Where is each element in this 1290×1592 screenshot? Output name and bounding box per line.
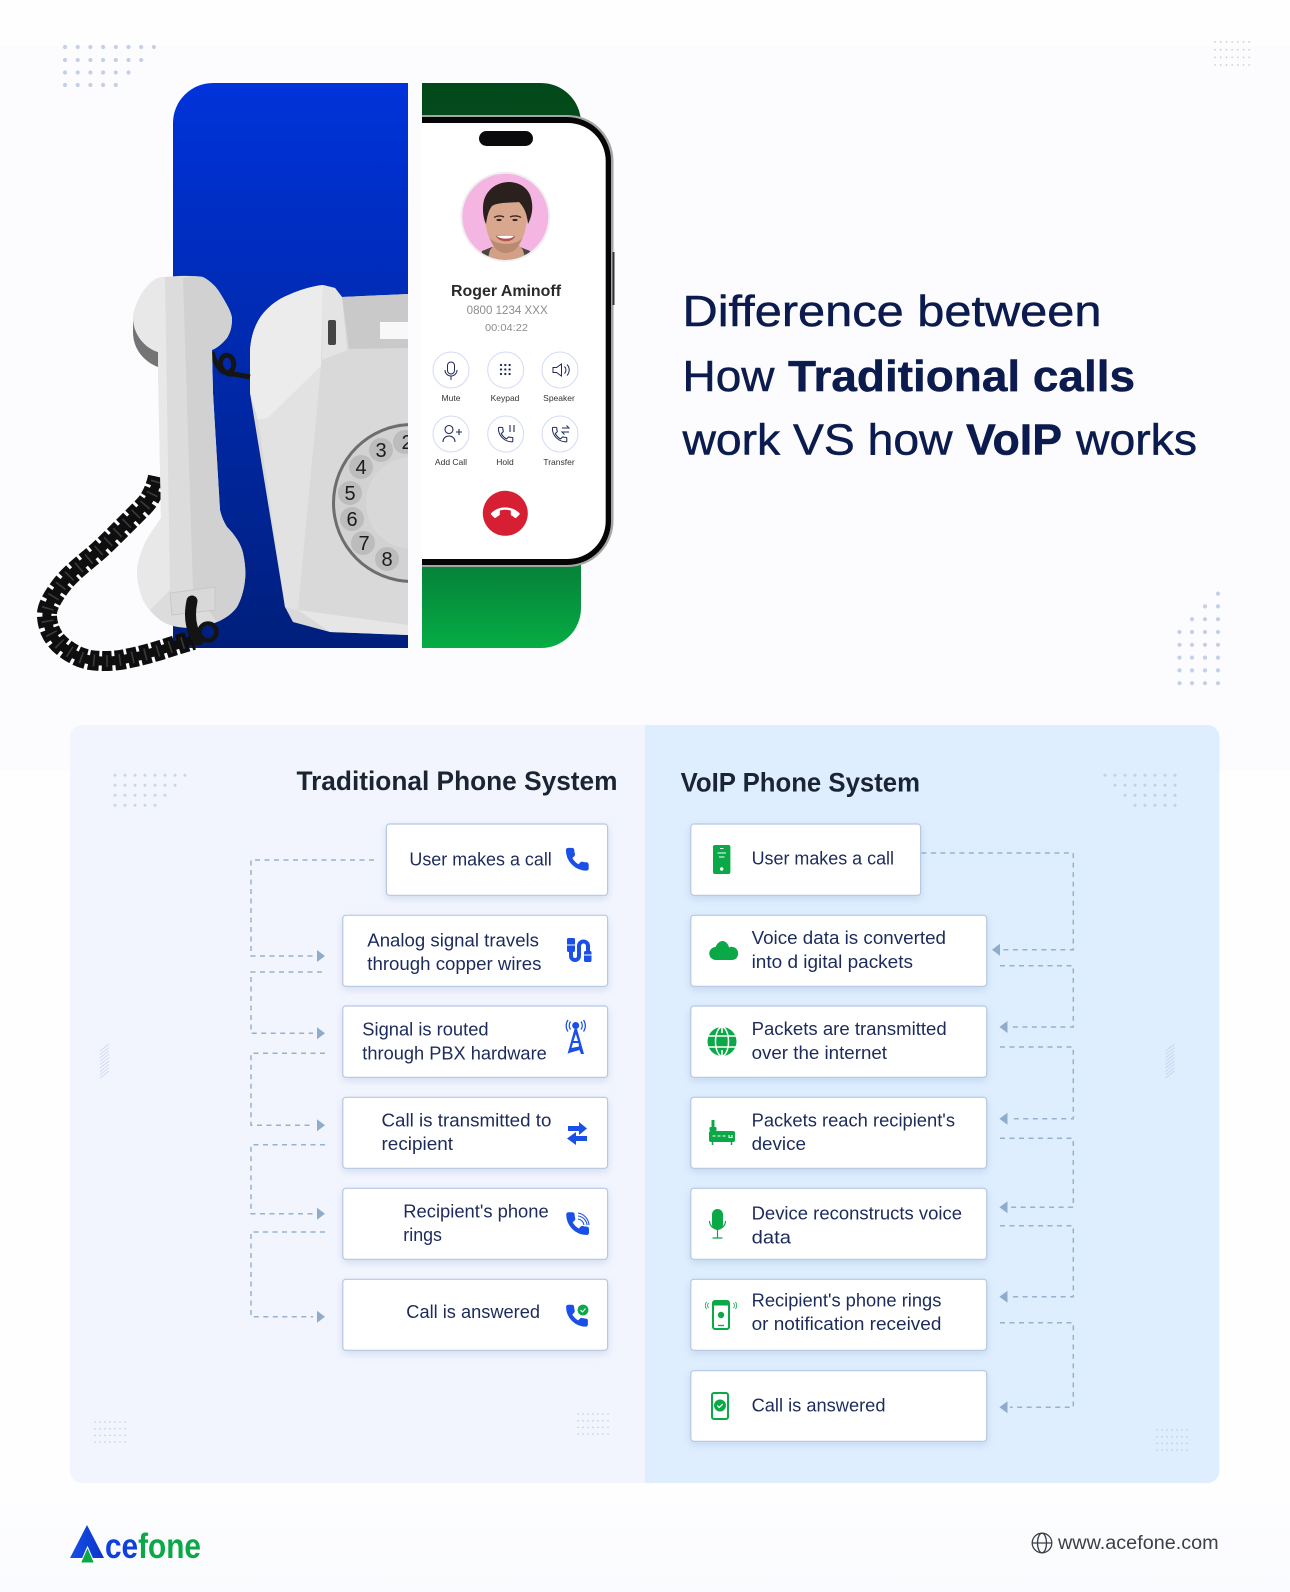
telephone base xyxy=(250,285,408,635)
website link: www.acefone.com xyxy=(1057,1533,1219,1554)
button: hold xyxy=(488,416,524,467)
icon: cloud xyxy=(709,941,738,960)
dot pattern: voip top xyxy=(1105,775,1175,805)
dot pattern: right staircase xyxy=(1180,594,1218,684)
logo: acefone xyxy=(70,1525,201,1566)
cord plug xyxy=(190,601,216,640)
button: add call xyxy=(433,416,469,467)
icon: microphone xyxy=(710,1209,726,1238)
step: packets transmitted: Packets are transmitted xyxy=(752,1018,947,1039)
title: Difference between xyxy=(682,287,1102,336)
stripes: traditional xyxy=(100,1044,109,1078)
phone notch xyxy=(479,131,533,146)
button: transfer: Transfer xyxy=(543,457,575,467)
caller avatar xyxy=(460,172,550,262)
step: packets reach device xyxy=(691,1097,987,1168)
logo mark xyxy=(70,1525,104,1563)
upper cord xyxy=(212,352,250,377)
step: call transmitted: recipient xyxy=(382,1133,453,1154)
step: packets reach device: device xyxy=(752,1133,806,1154)
icon: globe xyxy=(1032,1533,1052,1553)
blue panel xyxy=(173,83,408,648)
step: recipient phone rings xyxy=(691,1279,987,1350)
step: device reconstructs xyxy=(691,1188,987,1259)
rotary dial: 8 xyxy=(381,549,393,571)
step: user makes a call: User makes a call xyxy=(409,848,552,869)
coiled cord xyxy=(47,477,193,661)
illustration: green panel with smartphone xyxy=(422,83,614,648)
button: transfer xyxy=(542,416,578,467)
title: VoIP xyxy=(966,416,1062,464)
step: signal routed xyxy=(343,1006,608,1077)
dot pattern: traditional bottom right xyxy=(578,1414,608,1434)
icon: cable xyxy=(567,938,592,962)
rotary dial: 6 xyxy=(346,509,358,531)
connector arrows: voip xyxy=(921,853,1073,1413)
smartphone xyxy=(422,115,614,567)
step: packets transmitted xyxy=(691,1006,987,1077)
icon: transfer arrows xyxy=(567,1122,587,1145)
rotary dial xyxy=(332,423,408,583)
button: speaker: Speaker xyxy=(543,393,575,403)
title: works xyxy=(1075,416,1197,464)
dot pattern: traditional top xyxy=(115,775,185,805)
stripes: voip xyxy=(1166,1044,1174,1078)
title: work VS how xyxy=(681,416,953,464)
step: voice data converted: Voice data is converted xyxy=(752,927,946,948)
step: recipient phone rings: or notification received xyxy=(752,1313,941,1334)
rotary dial: 4 xyxy=(355,457,367,479)
button: keypad xyxy=(488,352,524,403)
step: recipient phone rings: Recipient's phone rings xyxy=(752,1289,941,1310)
step: voice data converted: into d igital packets xyxy=(752,951,913,972)
step: device reconstructs: Device reconstructs voice xyxy=(752,1202,962,1223)
handset xyxy=(133,276,245,628)
step: packets reach device: Packets reach recipient's xyxy=(752,1109,955,1130)
connector arrows: traditional xyxy=(251,860,374,1323)
title xyxy=(681,287,1197,464)
green panel xyxy=(422,83,581,648)
caller number: 0800 1234 XXX xyxy=(467,305,548,317)
step: phone rings: rings xyxy=(403,1224,442,1245)
step: call answered xyxy=(691,1371,987,1441)
step: user makes a call xyxy=(386,824,608,895)
step: analog signal: Analog signal travels xyxy=(367,930,539,951)
dot pattern: top right xyxy=(1215,42,1249,65)
step: packets transmitted: over the internet xyxy=(752,1042,887,1063)
panel: voip phone system xyxy=(645,725,1219,1483)
heading: traditional phone system: Traditional Phone System xyxy=(296,766,618,796)
illustration: blue panel with rotary telephone xyxy=(36,83,408,671)
step: analog signal: through copper wires xyxy=(367,953,541,974)
step: call answered xyxy=(343,1279,608,1350)
step: user makes a call: User makes a call xyxy=(752,848,894,869)
logo wordmark: cefone xyxy=(105,1527,201,1566)
step: signal routed: through PBX hardware xyxy=(362,1042,547,1063)
step: call transmitted xyxy=(343,1097,608,1168)
button: add call: Add Call xyxy=(435,457,467,467)
call timer: 00:04:22 xyxy=(485,322,528,334)
button: mute: Mute xyxy=(442,393,461,403)
step: call answered: Call is answered xyxy=(406,1301,540,1322)
heading: voip phone system: VoIP Phone System xyxy=(681,768,920,798)
icon: green handset device xyxy=(713,845,730,874)
rotary dial: 5 xyxy=(344,483,356,505)
dot pattern: voip bottom xyxy=(1157,1430,1187,1450)
step: signal routed: Signal is routed xyxy=(362,1018,489,1039)
icon: vibrating phone xyxy=(705,1300,737,1329)
step: call answered: Call is answered xyxy=(752,1394,886,1415)
title: Traditional calls xyxy=(788,352,1135,401)
rotary dial: 2 xyxy=(401,432,413,454)
icon: tower xyxy=(566,1020,585,1054)
title: How xyxy=(682,352,775,401)
button: mute xyxy=(433,352,469,403)
icon: globe xyxy=(708,1027,736,1056)
panel: traditional phone system xyxy=(70,725,645,1483)
icon: router xyxy=(709,1120,735,1145)
step: call transmitted: Call is transmitted to xyxy=(382,1110,551,1131)
step: voice data converted xyxy=(691,915,987,986)
step: user makes a call xyxy=(691,824,921,895)
rotary dial: 3 xyxy=(375,440,387,462)
button: hold: Hold xyxy=(496,457,514,467)
dot pattern: top left xyxy=(65,47,154,85)
button: keypad: Keypad xyxy=(491,393,520,403)
icon: phone with badge xyxy=(712,1393,728,1419)
end call button xyxy=(483,491,528,536)
rotary dial: 7 xyxy=(358,533,370,555)
step: phone rings xyxy=(343,1188,608,1259)
button: speaker xyxy=(542,352,578,403)
icon: phone with check xyxy=(567,1304,589,1326)
dot pattern: traditional bottom left xyxy=(95,1422,125,1442)
icon: ringing phone xyxy=(567,1213,589,1234)
icon: phone xyxy=(567,849,588,870)
step: analog signal xyxy=(343,915,608,986)
step: device reconstructs: data xyxy=(752,1226,792,1247)
caller name: Roger Aminoff xyxy=(451,283,562,300)
step: phone rings: Recipient's phone xyxy=(403,1200,549,1221)
